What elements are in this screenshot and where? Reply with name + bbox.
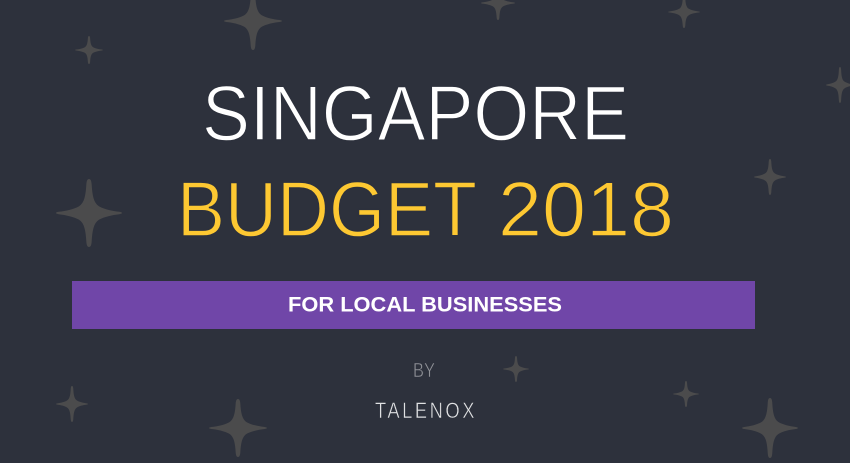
title: Budget 2018: 2018 bbox=[498, 166, 674, 253]
banner text: FOR LOCAL BUSINESSES bbox=[288, 294, 562, 316]
title: Budget 2018: BUDGET bbox=[177, 166, 477, 253]
title: Singapore: SINGAPORE bbox=[202, 70, 629, 157]
brand name: Talenox: TALENOX bbox=[375, 398, 477, 423]
by label: BY bbox=[413, 360, 435, 382]
title: Budget 2018 bbox=[177, 166, 674, 253]
banner: for local businesses bbox=[72, 281, 755, 329]
